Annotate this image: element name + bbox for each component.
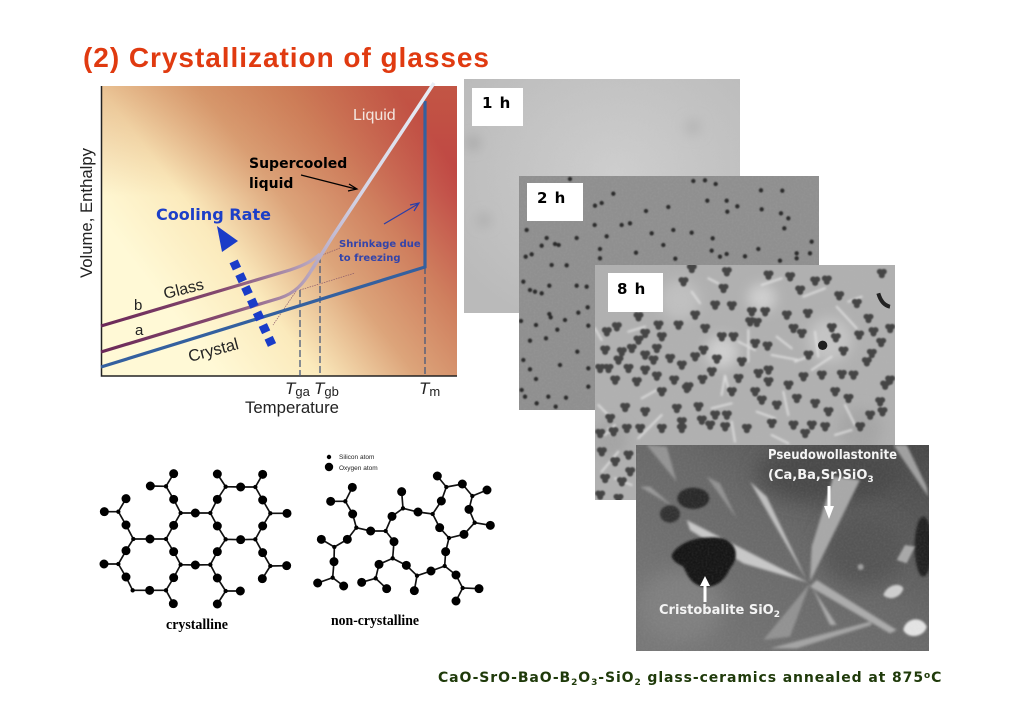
y-axis label: Volume, Enthalpy: [78, 147, 96, 278]
arrow to needle: [824, 486, 834, 519]
oxygen atoms: [318, 476, 490, 601]
arrow to grain: [700, 576, 710, 602]
label 8 h: 8 h: [617, 280, 646, 298]
label: non-crystalline: non-crystalline: [331, 613, 420, 629]
silicon atoms: [118, 486, 270, 591]
title: (2) Crystallization of glasses: [83, 42, 489, 73]
shaded regions: [637, 443, 932, 643]
crystal label: Crystal: [186, 335, 241, 366]
glass label: Glass: [162, 276, 206, 303]
photo: 8 h: [592, 265, 895, 500]
cooling rate label: Cooling Rate: [156, 205, 271, 224]
T m label: m: [429, 384, 440, 399]
guide lines for transition temperatures: [300, 256, 425, 376]
bonds: [318, 476, 490, 601]
T gb label: T: [314, 379, 326, 398]
label 1 h: 1 h: [482, 94, 511, 112]
curve label b: b: [134, 297, 142, 314]
liquid line: [311, 83, 434, 271]
label 2 h: [527, 183, 583, 221]
label: crystalline: crystalline: [166, 617, 229, 633]
large dark particle: [818, 341, 827, 350]
silicon atoms: [333, 487, 475, 588]
caption: 2: [571, 678, 578, 688]
bonds: [104, 474, 287, 604]
liquid label: Liquid: [353, 107, 396, 124]
T m label: T: [419, 379, 431, 398]
label: Cristobalite: Cristobalite SiO: [659, 603, 774, 618]
caption: o: [924, 671, 931, 681]
photo: 2 h: [519, 176, 819, 410]
shrinkage arrow: [384, 203, 419, 224]
needle crystals: [595, 278, 862, 485]
chart: volume-enthalpy vs temperature: [78, 83, 457, 417]
label: formula: (Ca,Ba,Sr)SiO: [768, 468, 867, 483]
shrinkage label: to freezing: [339, 253, 401, 264]
caption: CaO-SrO-BaO-B: [438, 670, 571, 686]
extrapolation dotted lines: [273, 248, 355, 325]
legend: atoms: Silicon atom: [339, 454, 374, 461]
axes: [102, 86, 457, 376]
dark cristobalite grains: [660, 488, 736, 587]
bright particles: [858, 545, 927, 636]
crystal line: [101, 101, 425, 367]
x-axis label: Temperature: [245, 399, 339, 417]
label: formula: 3: [867, 475, 874, 485]
supercooled liquid label: Supercooled: [249, 156, 347, 172]
arrow to supercooled liquid: [301, 175, 357, 191]
chart background: [101, 86, 457, 376]
label: Cristobalite: 2: [774, 610, 780, 620]
supercooled liquid label: liquid: [249, 176, 293, 192]
T ga label: T: [285, 379, 297, 398]
T gb label: gb: [324, 384, 339, 399]
diagram: crystalline network: [104, 474, 287, 604]
shrinkage label: Shrinkage due: [339, 239, 421, 250]
legend: atoms: Oxygen atom: [339, 465, 378, 472]
dark cluster blobs: [598, 267, 892, 500]
T ga label: ga: [295, 384, 311, 399]
dark crystallite dots: [521, 179, 812, 407]
chart top shading: [101, 86, 457, 196]
caption: -SiO: [598, 670, 634, 686]
label 8 h: [608, 273, 663, 312]
oxygen atoms: [104, 474, 287, 604]
caption: 2: [634, 678, 642, 688]
caption: 3: [591, 678, 598, 688]
glass line a: [101, 271, 311, 352]
cooling rate dashed arrow: [217, 226, 272, 345]
photo: high-magnification micrograph: [636, 443, 932, 651]
caption: glass-ceramics annealed at 875: [642, 670, 924, 686]
legend: atoms: [325, 454, 378, 472]
glass line b: [101, 254, 320, 326]
diagram: non-crystalline network: [318, 476, 490, 601]
label: Pseudowollastonite: Pseudowollastonite: [768, 448, 897, 463]
caption: C: [931, 670, 942, 686]
photo: 1 h: [464, 79, 740, 313]
needle crystals: [640, 445, 928, 648]
label 1 h: [472, 88, 523, 126]
curve label a: a: [135, 322, 144, 339]
caption: O: [578, 670, 591, 686]
label 2 h: 2 h: [537, 189, 566, 207]
